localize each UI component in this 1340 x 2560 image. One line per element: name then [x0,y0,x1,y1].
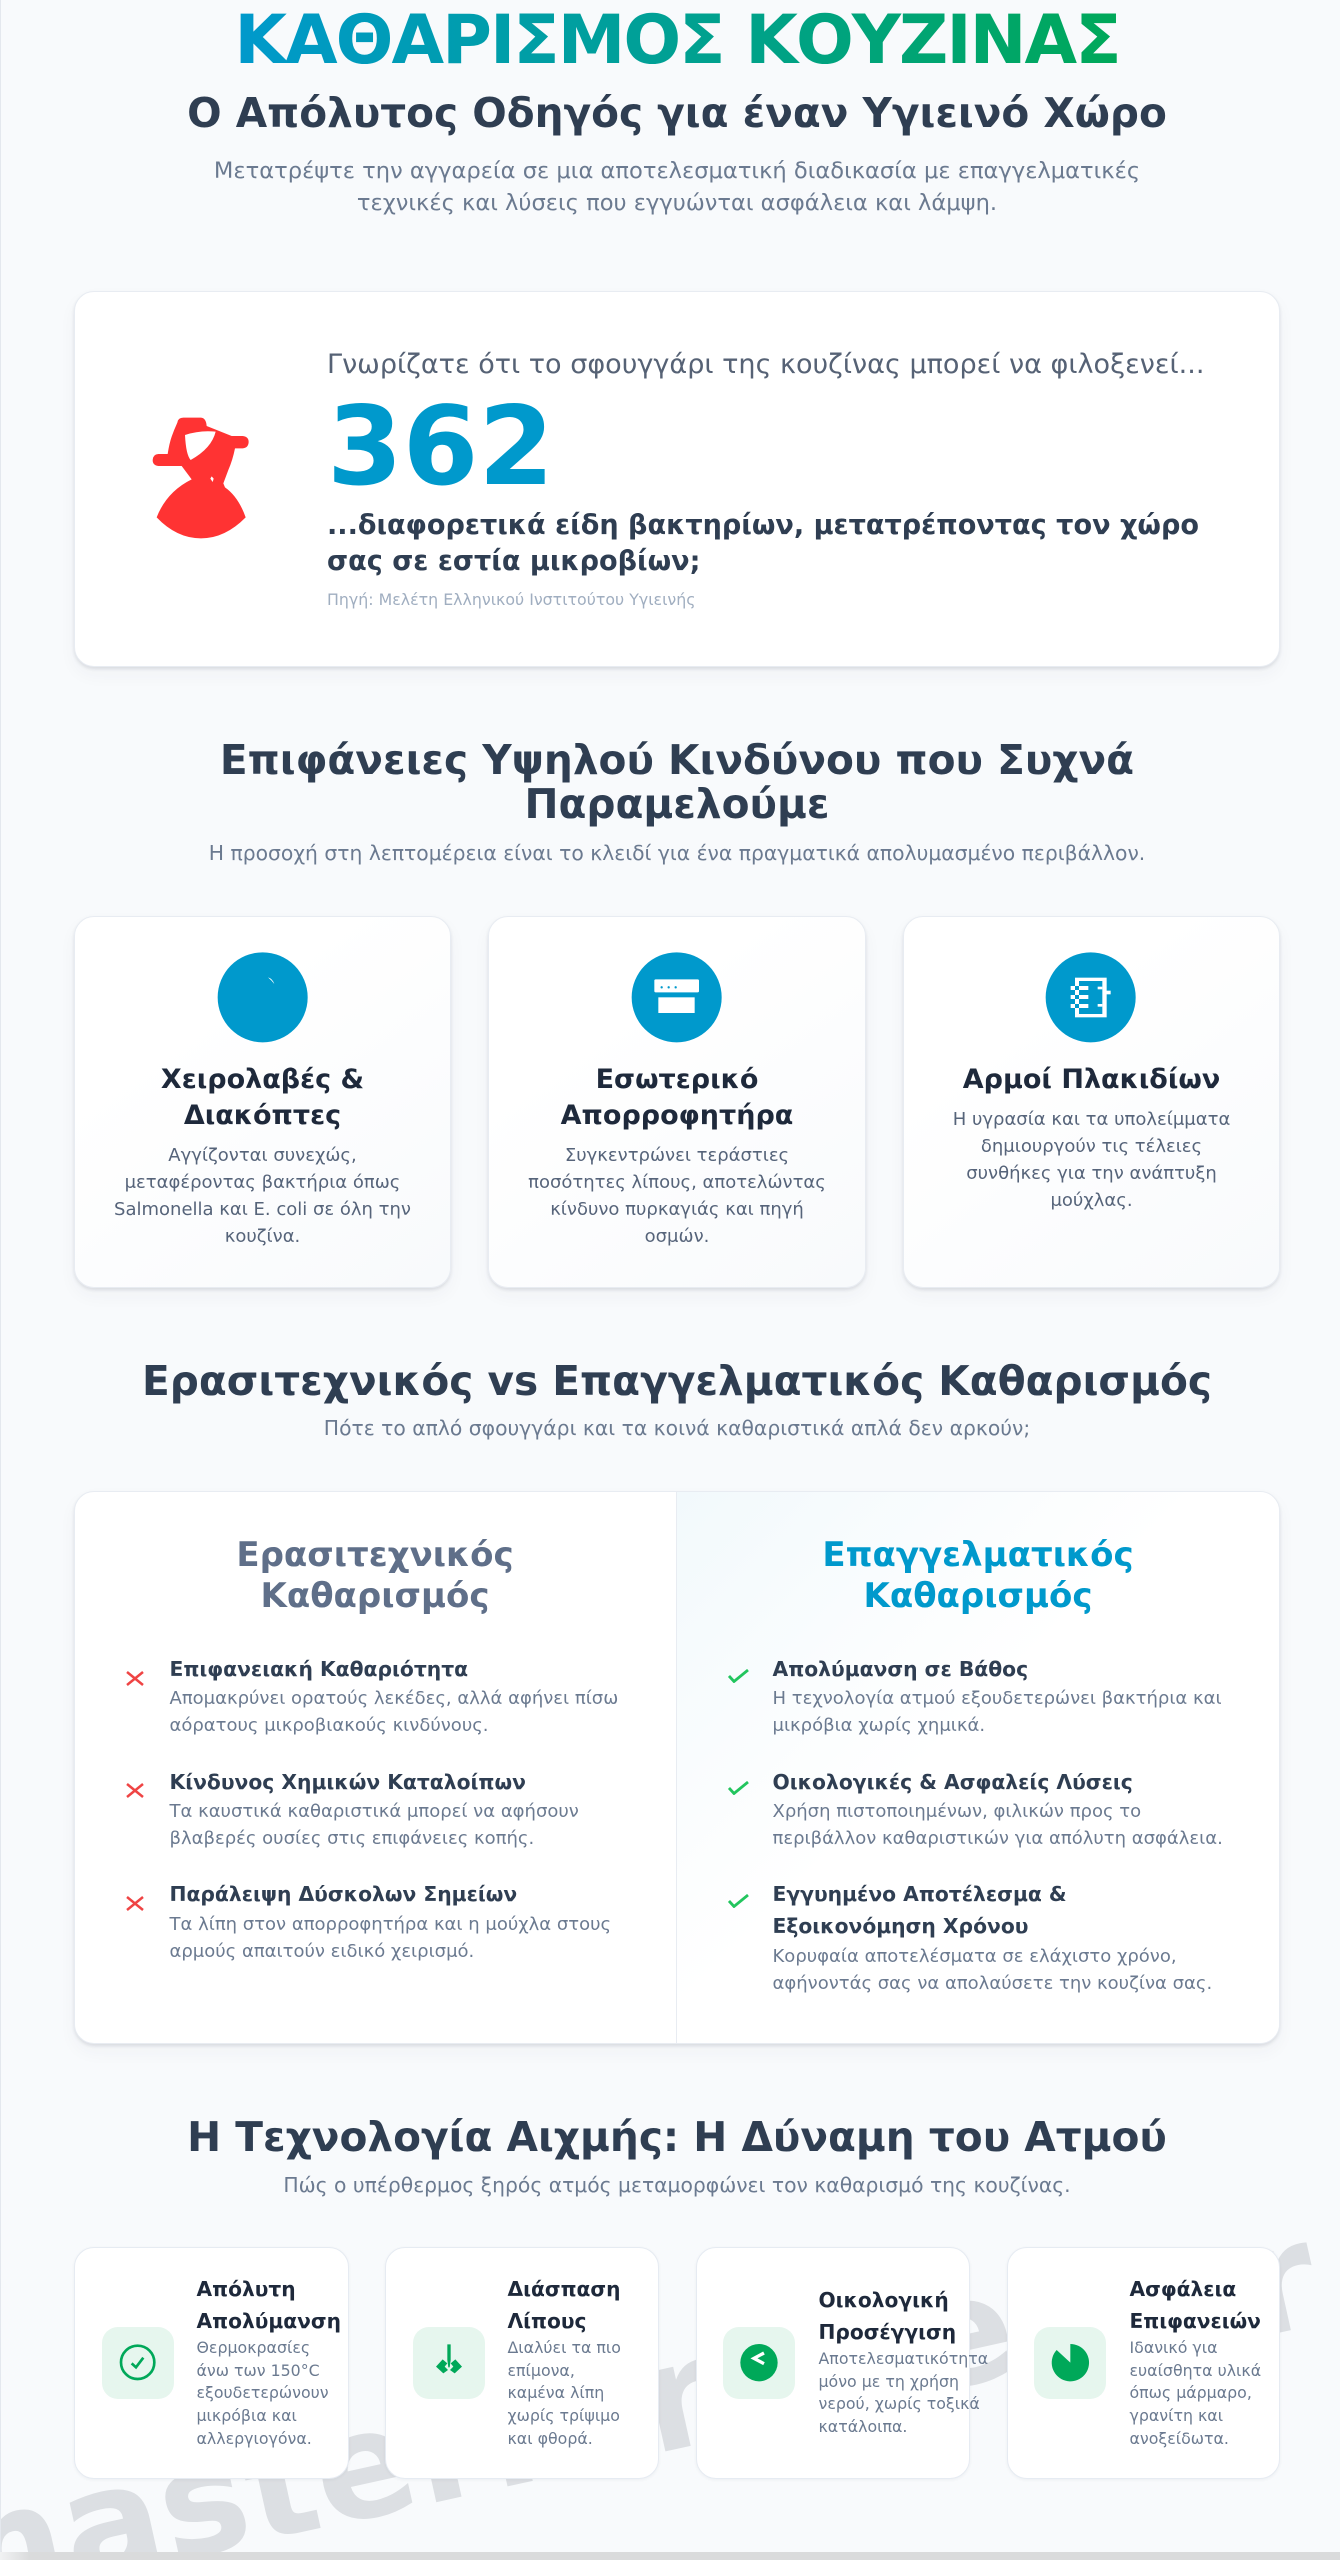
intro text: Μετατρέψτε την αγγαρεία σε μια αποτελεσματική διαδικασία με επαγγελματικές [214,158,1140,184]
cross mark 2 [126,1783,144,1798]
card text: handles: Αγγίζονται συνεχώς, [168,1145,357,1166]
panel: surface safety [1007,2247,1280,2479]
cross mark 1 [126,1671,144,1686]
card title: hood: Απορροφητήρα [561,1100,793,1131]
icon: arrow down [436,2344,462,2374]
amateur item 1 text: Απομακρύνει ορατούς λεκέδες, αλλά αφήνει πίσω [170,1688,618,1709]
hero statement: ...διαφορετικά είδη βακτηρίων, μετατρέποντας τον χώρο [327,510,1199,541]
heading: amateur cleaning [236,1535,514,1616]
hero number: 362 [327,383,554,510]
tech title: safety: Επιφανειών [1130,2309,1261,2333]
tech text: safety: ανοξείδωτα. [1130,2429,1229,2448]
hero lead text: Γνωρίζατε ότι το σφουγγάρι της κουζίνας μπορεί να φιλοξενεί... [327,349,1204,380]
card title: tile joints: Αρμοί Πλακιδίων [963,1064,1220,1095]
card text: tile joints: μούχλας. [1050,1190,1133,1211]
amateur item 3 text: Τα λίπη στον απορροφητήρα και η μούχλα στους [170,1914,611,1935]
intro text [214,158,1140,216]
card text: hood: κίνδυνο πυρκαγιάς και πηγή [550,1199,804,1220]
icon: pie [1052,2344,1090,2382]
tech text: ecological [818,2349,988,2436]
card title: handles: Χειρολαβές & [161,1064,364,1095]
amateur item 1 title: Επιφανειακή Καθαριότητα [170,1657,468,1681]
tech title: disinfection [196,2277,341,2333]
amateur item 3 text [169,1914,611,1962]
heading: amateur cleaning: Καθαρισμός [260,1576,490,1616]
card text: hood: οσμών. [645,1226,709,1247]
professional item 2 text: Χρήση πιστοποιημένων, φιλικών προς το [772,1801,1141,1822]
hero statement: σας σε εστία μικροβίων; [327,546,700,577]
amateur item 2 text [169,1801,579,1849]
tech title: grease: Λίπους [508,2309,586,2333]
card text: handles: Salmonella και E. coli σε όλη την [114,1199,411,1220]
professional item 3 text: Κορυφαία αποτελέσματα σε ελάχιστο χρόνο, [772,1946,1177,1967]
hero source: Πηγή: Μελέτη Ελληνικού Ινστιτούτου Υγιεινής [327,590,696,609]
amateur item 3 text: αρμούς απαιτούν ειδικό χειρισμό. [170,1941,474,1962]
card text: hood [528,1145,826,1247]
amateur item 2 text: βλαβερές ουσίες στις επιφάνειες κοπής. [170,1828,534,1849]
heading: steam technology: Η Τεχνολογία Αιχμής: Η Δύναμη του Ατμού [187,2113,1167,2161]
panel: professional side background [676,1492,1282,2045]
bottom edge strip [0,2552,1340,2560]
icon: tile joints [1046,952,1136,1042]
panel: hood interior [488,916,866,1288]
card text: tile joints: Η υγρασία και τα υπολείμματα [953,1109,1230,1130]
panel: ecological approach [696,2247,970,2479]
professional item 3 text [772,1946,1212,1994]
panel: hero statistic [74,291,1280,667]
tech title: disinfection: Απολύμανση [196,2309,341,2333]
professional item 2 text [772,1801,1223,1849]
panel: handles and switches [74,916,451,1288]
tech text: ecological: Αποτελεσματικότητα [818,2349,988,2368]
icon: chevron circle [740,2344,778,2382]
professional item 1 text: Η τεχνολογία ατμού εξουδετερώνει βακτήρια και [772,1688,1222,1709]
subheading: steam technology: Πώς ο υπέρθερμος ξηρός ατμός μεταμορφώνει τον καθαρισμό της κουζίνας. [283,2173,1071,2197]
card text: handles: μεταφέροντας βακτήρια όπως [125,1172,400,1193]
tech text: grease: Διαλύει τα πιο [508,2338,621,2357]
tech text: ecological: μόνο με τη χρήση [818,2372,959,2391]
card title: handles: Διακόπτες [184,1100,341,1131]
check mark 3 [728,1894,749,1908]
card text: tile joints: συνθήκες για την ανάπτυξη [966,1163,1217,1184]
check mark 1 [728,1669,749,1683]
subheading: comparison: Πότε το απλό σφουγγάρι και τα κοινά καθαριστικά απλά δεν αρκούν; [324,1416,1030,1440]
professional item 2 text: περιβάλλον καθαριστικών για απόλυτη ασφάλεια. [772,1828,1223,1849]
tech title: grease [508,2277,621,2333]
amateur item 2 text: Τα καυστικά καθαριστικά μπορεί να αφήσουν [170,1801,579,1822]
check mark 2 [728,1781,749,1795]
professional item 1 text [772,1688,1222,1736]
heading: high risk surfaces [220,736,1134,828]
heading: amateur cleaning: Ερασιτεχνικός [236,1535,514,1575]
tech text: safety: όπως μάρμαρο, [1130,2383,1252,2402]
subtitle: Ο Απόλυτος Οδηγός για έναν Υγιεινό Χώρο [187,89,1167,137]
heading: professional cleaning: Επαγγελματικός [822,1535,1134,1575]
tech text: grease: επίμονα, [508,2361,575,2380]
heading: high risk surfaces: Επιφάνειες Υψηλού Κινδύνου που Συχνά [220,736,1134,784]
heading: comparison: Ερασιτεχνικός vs Επαγγελματικός Καθαρισμός [142,1357,1212,1405]
tech text: grease: χωρίς τρίψιμο [508,2406,620,2425]
tech title: ecological: Προσέγγιση [818,2320,956,2344]
tech title: ecological: Οικολογική [818,2288,949,2312]
icon box: grease [413,2327,485,2399]
professional item 3 text: αφήνοντάς σας να απολαύσετε την κουζίνα σας. [772,1973,1212,1994]
tech title: safety: Ασφάλεια [1130,2277,1236,2301]
card text: hood: Συγκεντρώνει τεράστιες [565,1145,789,1166]
card title: hood: Εσωτερικό [596,1064,758,1095]
watermark: e [895,2238,1030,2428]
tech text: grease [508,2338,621,2448]
professional item 1 title: Απολύμανση σε Βάθος [772,1657,1028,1681]
tech text: grease: και φθορά. [508,2429,593,2448]
heading: professional cleaning [822,1535,1134,1616]
amateur item 2 title: Κίνδυνος Χημικών Καταλοίπων [170,1770,526,1794]
card text: tile joints: δημιουργούν τις τέλειες [981,1136,1202,1157]
icon box: disinfection [102,2327,174,2399]
tech text: safety: ευαίσθητα υλικά [1130,2361,1261,2380]
professional item 3 title [772,1882,1067,1938]
professional item 1 text: μικρόβια χωρίς χημικά. [772,1715,985,1736]
icon box: ecological [723,2327,795,2399]
heading: high risk surfaces: Παραμελούμε [525,780,829,828]
tech text: safety: Ιδανικό για [1130,2338,1218,2357]
card text: handles [114,1145,411,1247]
professional item 3 title: Εξοικονόμηση Χρόνου [772,1914,1028,1938]
cross mark 3 [126,1896,144,1911]
icon: hood [632,952,722,1042]
card text: tile joints [953,1109,1230,1211]
tech text: safety: γρανίτη και [1130,2406,1223,2425]
icon: handle circle [218,952,308,1042]
tech text: disinfection: αλλεργιογόνα. [196,2429,312,2448]
card title: handles [161,1064,364,1131]
tech text: ecological: νερού, χωρίς τοξικά [818,2394,980,2413]
tech title: disinfection: Απόλυτη [196,2277,296,2301]
icon: bacteria [152,418,249,538]
tech title: grease: Διάσπαση [508,2277,621,2301]
tech text: safety [1130,2337,1261,2451]
title: ΚΑΘΑΡΙΣΜΟΣ ΚΟΥΖΙΝΑΣ [234,1,1120,80]
amateur item 3 title: Παράλειψη Δύσκολων Σημείων [170,1882,517,1906]
panel: grease breakdown [385,2247,659,2479]
intro text: τεχνικές και λύσεις που εγγυώνται ασφάλεια και λάμψη. [357,190,997,216]
amateur item 1 text [170,1688,618,1736]
panel: absolute disinfection [74,2247,349,2479]
icon: check circle [120,2344,156,2380]
professional item 2 title: Οικολογικές & Ασφαλείς Λύσεις [772,1770,1133,1794]
card text: hood: ποσότητες λίπους, αποτελώντας [528,1172,826,1193]
amateur item 1 text: αόρατους μικροβιακούς κινδύνους. [170,1715,489,1736]
tech text: disinfection: άνω των 150°C [196,2361,320,2380]
watermark: r [624,2305,732,2488]
tech title: ecological [818,2288,956,2344]
tech text: ecological: κατάλοιπα. [818,2417,907,2436]
card title: hood [560,1064,793,1131]
hero statement [327,510,1199,577]
watermark [1,2200,1332,2552]
tech text: disinfection [196,2338,329,2448]
card text: handles: κουζίνα. [225,1226,300,1247]
icon box: safety [1034,2327,1106,2399]
tech text: disinfection: εξουδετερώνουν [196,2383,329,2402]
tech title: safety [1130,2277,1261,2333]
panel: tile joints [903,916,1280,1288]
panel: comparison [74,1491,1280,2044]
heading: professional cleaning: Καθαρισμός [863,1576,1093,1616]
tech text: disinfection: Θερμοκρασίες [196,2338,310,2357]
tech text: disinfection: μικρόβια και [196,2406,297,2425]
professional item 3 title: Εγγυημένο Αποτέλεσμα & [772,1882,1067,1906]
subheading: high risk surfaces: Η προσοχή στη λεπτομέρεια είναι το κλειδί για ένα πραγματικά απολυμασμένο περιβάλλον. [209,841,1145,865]
tech text: grease: καμένα λίπη [508,2383,604,2402]
